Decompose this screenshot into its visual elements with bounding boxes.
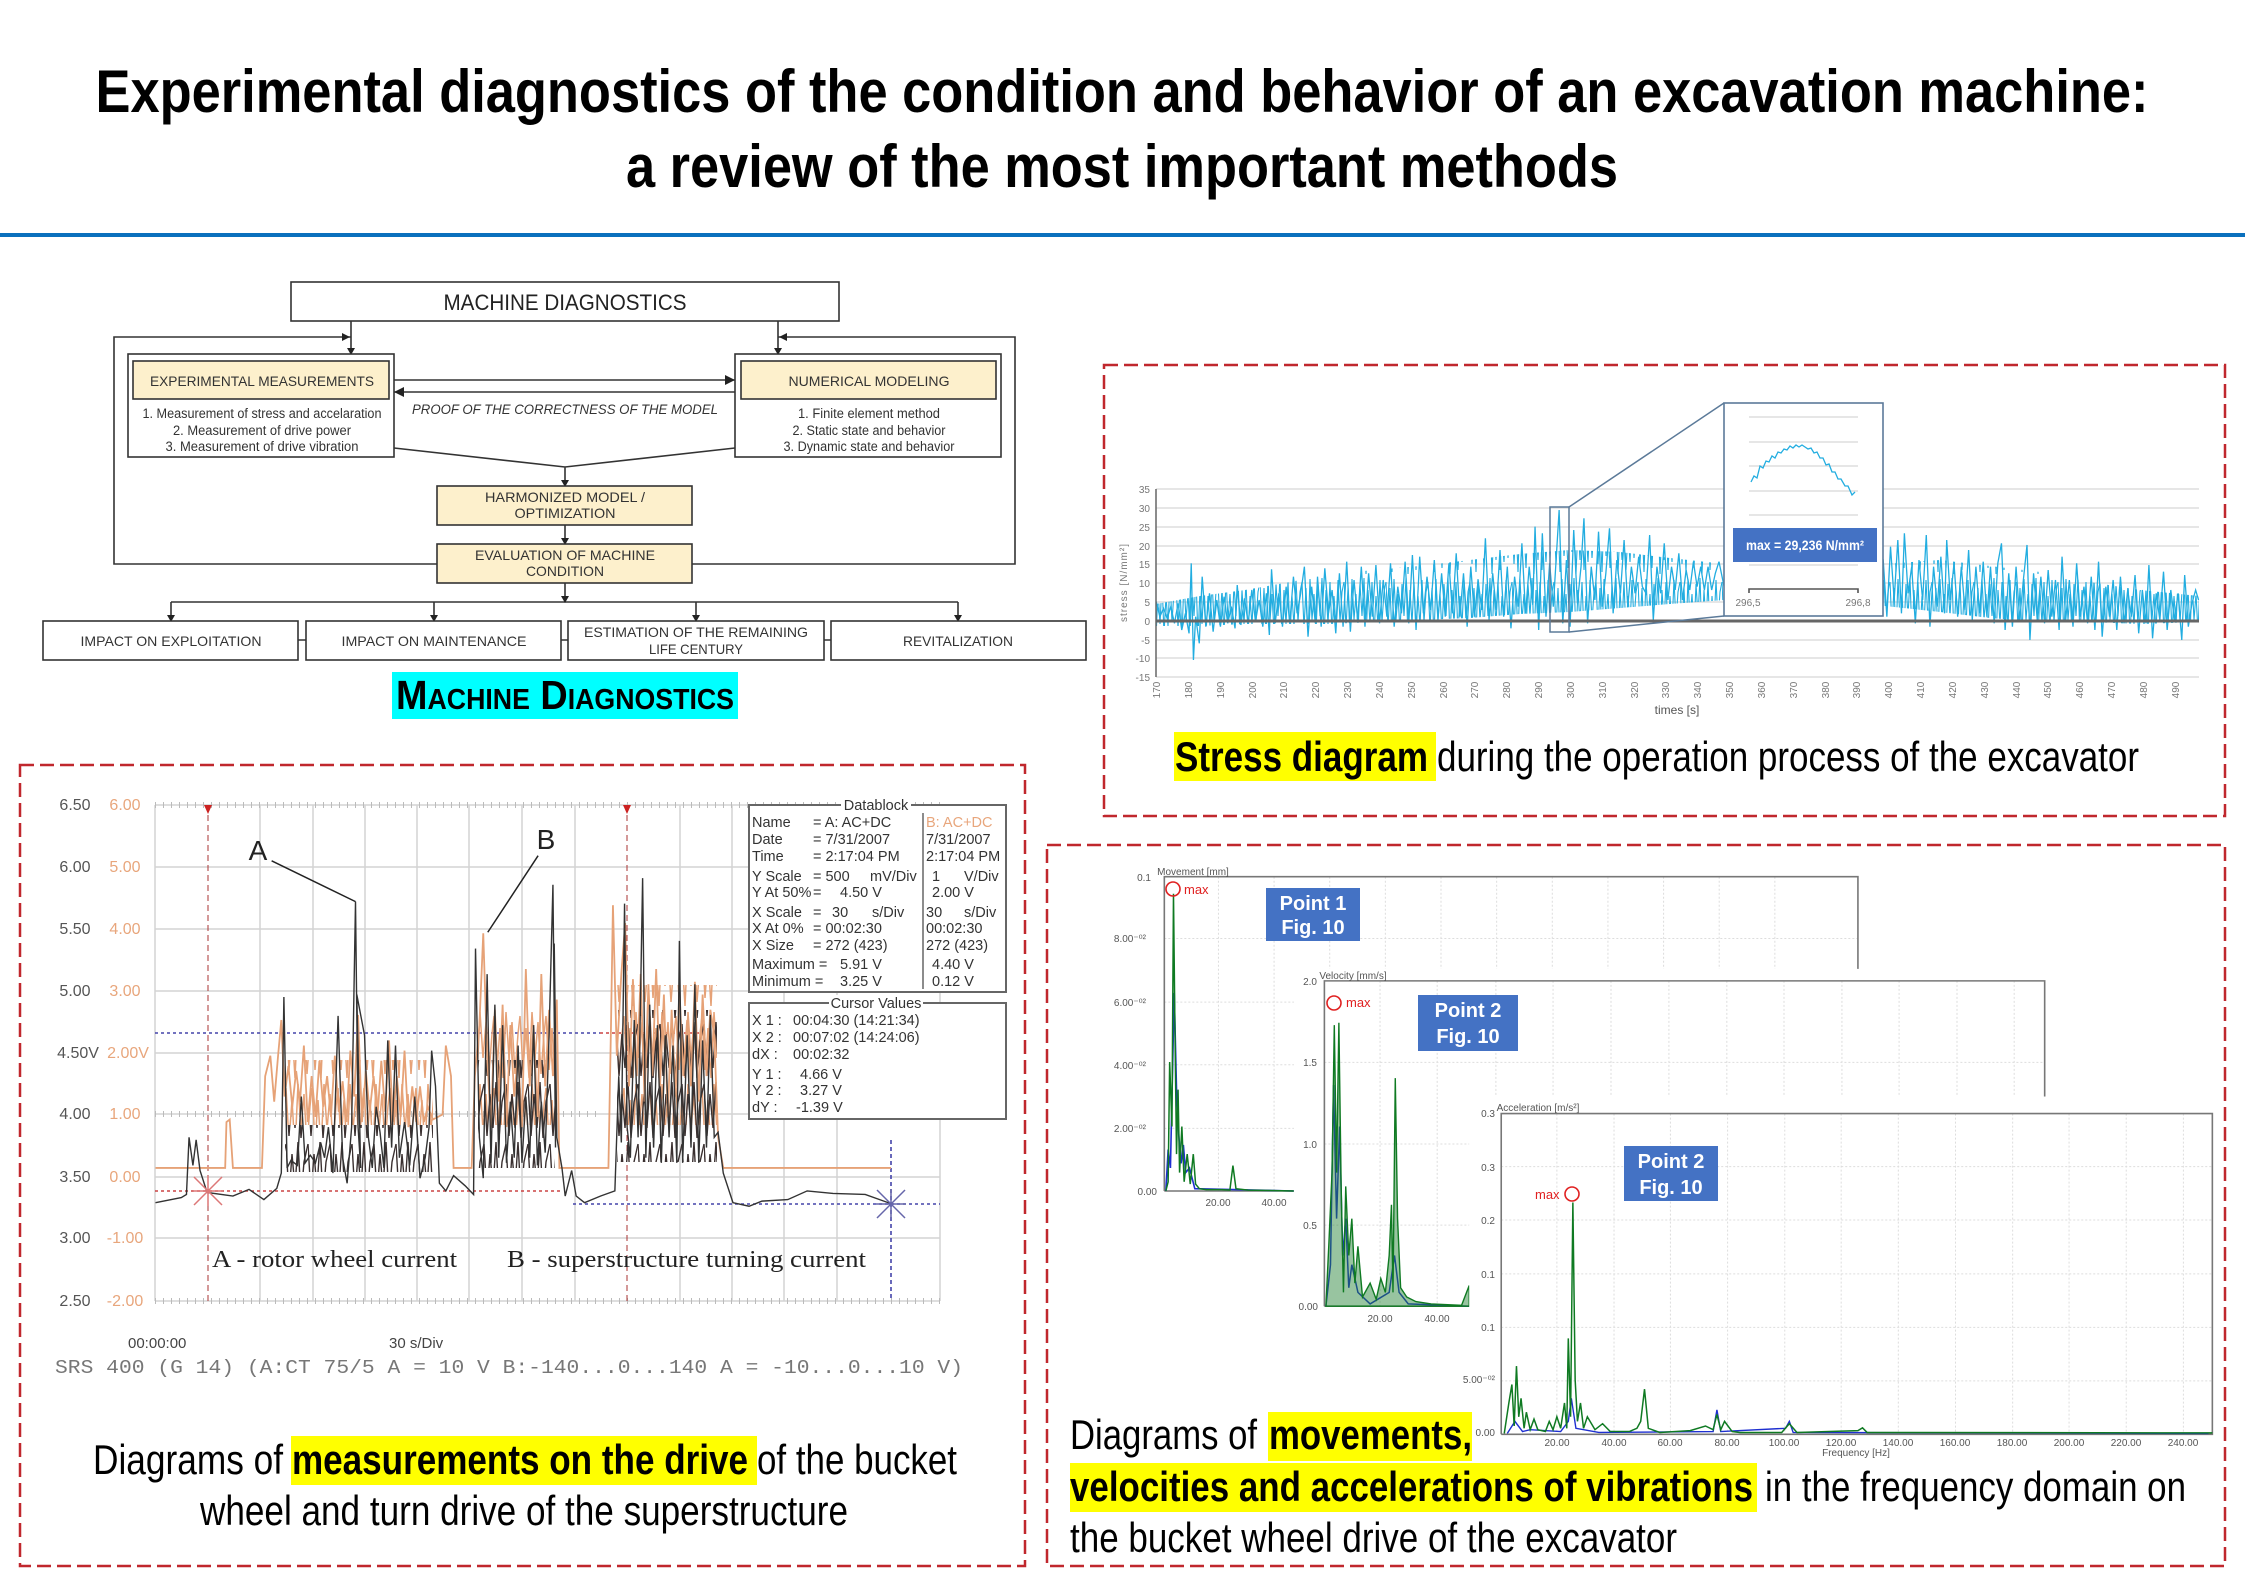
cursor values: dY : xyxy=(752,1100,778,1116)
box: evaluation of machine condition: CONDITION xyxy=(526,563,604,579)
chart: velocity spectrum: 2.0 xyxy=(1303,977,1317,988)
x axis labels: 270 xyxy=(1470,681,1481,698)
x axis labels: 230 xyxy=(1343,681,1354,698)
cursor values: dX : xyxy=(752,1047,778,1063)
chart: acceleration spectrum xyxy=(1463,1097,2220,1459)
cursor values: 4.66 V xyxy=(800,1067,842,1083)
chart: velocity spectrum: 1.0 xyxy=(1303,1140,1317,1151)
label: point 2 velocity xyxy=(1418,995,1518,1051)
chart: acceleration spectrum: 200.00 xyxy=(2054,1438,2085,1449)
chart: acceleration spectrum: 0.00 xyxy=(1476,1428,1495,1439)
time labels: 30 s/Div xyxy=(389,1335,444,1352)
datablock: 2.00 V xyxy=(932,885,974,901)
chart: acceleration spectrum: Frequency [Hz] xyxy=(1822,1448,1890,1459)
right axis labels: 2.00V xyxy=(107,1045,149,1062)
datablock: 4.50 V xyxy=(840,885,882,901)
chart: stress over time xyxy=(1119,485,2199,717)
label: point 2 acceleration: Fig. 10 xyxy=(1639,1177,1703,1199)
label: point 2 velocity: Fig. 10 xyxy=(1436,1026,1500,1048)
box: impact on exploitation xyxy=(43,621,298,660)
caption: vibration spectra xyxy=(1070,1411,2186,1561)
label: point 1 xyxy=(1266,888,1360,941)
chart: velocity spectrum: Velocity [mm/s] xyxy=(1319,971,1387,982)
curve labels: A xyxy=(249,835,268,866)
chart: acceleration spectrum: max xyxy=(1535,1187,1560,1202)
x axis labels: 260 xyxy=(1439,681,1450,698)
label: point 2 velocity: Point 2 xyxy=(1435,1000,1501,1022)
caption: drive measurements: measurements on the drive xyxy=(292,1436,748,1483)
box: experimental measurements: 2. Measurement of drive power xyxy=(173,423,351,438)
x axis labels: 440 xyxy=(2012,681,2023,698)
cursor values: X 2 : xyxy=(752,1030,782,1046)
chart: velocity spectrum xyxy=(1294,969,2048,1333)
cursor values xyxy=(749,995,1006,1119)
box: impact on maintenance xyxy=(306,621,561,660)
caption: vibration spectra: Diagrams of xyxy=(1070,1411,1257,1458)
caption: drive measurements: Diagrams of xyxy=(93,1436,283,1483)
datablock: X Scale xyxy=(752,905,802,921)
datablock: = 500 xyxy=(813,869,850,885)
datablock: 7/31/2007 xyxy=(926,832,991,848)
chart: velocity spectrum: 1.5 xyxy=(1303,1058,1317,1069)
x axis labels: 420 xyxy=(1948,681,1959,698)
datablock: V/Div xyxy=(964,869,999,885)
series A: rotor wheel current xyxy=(155,878,891,1206)
x axis labels: 330 xyxy=(1661,681,1672,698)
cursor values: X 1 : xyxy=(752,1013,782,1029)
x axis labels: 180 xyxy=(1184,681,1195,698)
left axis labels: 4.00 xyxy=(59,1106,91,1123)
chart: oscilloscope current traces: B xyxy=(537,824,555,855)
left axis labels: 5.00 xyxy=(59,983,91,1000)
chart: velocity spectrum: 40.00 xyxy=(1424,1314,1450,1325)
box: impact on maintenance: IMPACT ON MAINTENANCE xyxy=(342,633,526,649)
chart: movement spectrum: 0.00 xyxy=(1138,1187,1157,1198)
box: numerical modeling: NUMERICAL MODELING xyxy=(788,373,950,389)
box: estimation of remaining life xyxy=(568,621,824,660)
x axis labels: 370 xyxy=(1789,681,1800,698)
box: experimental measurements: EXPERIMENTAL MEASUREMENTS xyxy=(150,373,374,389)
datablock: Date xyxy=(752,832,783,848)
chart: movement spectrum: 0.1 xyxy=(1137,873,1151,884)
chart: movement spectrum: 40.00 xyxy=(1261,1198,1287,1209)
cursor values: Y 1 : xyxy=(752,1067,782,1083)
chart: acceleration spectrum: 0.1 xyxy=(1481,1270,1495,1281)
left axis labels: 6.00 xyxy=(59,859,91,876)
y axis labels: 30 xyxy=(1139,504,1150,515)
right axis labels: 4.00 xyxy=(109,921,141,938)
x axis labels: 450 xyxy=(2043,681,2054,698)
datablock: X At 0% xyxy=(752,921,804,937)
left axis labels: 4.50V xyxy=(57,1045,99,1062)
x axis labels: 310 xyxy=(1598,681,1609,698)
x axis labels: 240 xyxy=(1375,681,1386,698)
caption: stress diagram: Stress diagram xyxy=(1175,733,1428,780)
right axis labels: 5.00 xyxy=(109,859,141,876)
caption: drive measurements xyxy=(93,1436,957,1534)
cursor values: 3.27 V xyxy=(800,1083,842,1099)
x axis labels: 320 xyxy=(1630,681,1641,698)
datablock: Y At 50% xyxy=(752,885,811,901)
x axis labels: 300 xyxy=(1566,681,1577,698)
chart: acceleration spectrum: 160.00 xyxy=(1940,1438,1971,1449)
max value label xyxy=(1733,528,1877,562)
datablock: B: AC+DC xyxy=(926,815,992,831)
datablock: X Size xyxy=(752,938,794,954)
x axis labels: 360 xyxy=(1757,681,1768,698)
box: evaluation of machine condition: EVALUATION OF MACHINE xyxy=(475,547,655,563)
x axis labels: 460 xyxy=(2075,681,2086,698)
instrument line: SRS 400 (G 14) (A:CT 75/5 A = 10 V B:-140...0...140 A = -10...0...10 V) xyxy=(55,1357,963,1379)
time labels xyxy=(128,1335,444,1352)
y axis labels: 25 xyxy=(1139,523,1150,534)
chart: acceleration spectrum: 0.3 xyxy=(1481,1163,1495,1174)
x axis labels: 490 xyxy=(2171,681,2182,698)
datablock: = 2:17:04 PM xyxy=(813,849,900,865)
caption: drive measurements: wheel and turn drive of the superstructure xyxy=(199,1487,848,1534)
chart: movement spectrum: 6.00⁻⁰² xyxy=(1114,998,1147,1009)
chart: acceleration spectrum: 180.00 xyxy=(1997,1438,2028,1449)
datablock: = xyxy=(813,885,821,901)
cursor values: Y 2 : xyxy=(752,1083,782,1099)
box: machine diagnostics: MACHINE DIAGNOSTICS xyxy=(444,290,686,315)
label: point 1: Point 1 xyxy=(1280,893,1346,915)
x axis labels: 340 xyxy=(1693,681,1704,698)
label: point 2 acceleration xyxy=(1624,1146,1718,1201)
chart: acceleration spectrum: 40.00 xyxy=(1601,1438,1627,1449)
chart: acceleration spectrum: 220.00 xyxy=(2111,1438,2142,1449)
right axis labels: -1.00 xyxy=(107,1230,143,1247)
right axis labels: 1.00 xyxy=(109,1106,141,1123)
x axis labels: 250 xyxy=(1407,681,1418,698)
datablock: 1 xyxy=(932,869,940,885)
box: numerical modeling xyxy=(735,354,1001,457)
datablock: Y Scale xyxy=(752,869,802,885)
right axis labels: 3.00 xyxy=(109,983,141,1000)
datablock: Datablock xyxy=(844,798,909,814)
title xyxy=(96,58,2148,200)
x axis labels: 210 xyxy=(1279,681,1290,698)
x axis labels: 190 xyxy=(1216,681,1227,698)
panel: drive measurements xyxy=(20,765,1025,1566)
zoom inset xyxy=(1550,403,1883,632)
box: harmonized model: HARMONIZED MODEL / xyxy=(485,489,645,505)
box: estimation of remaining life: LIFE CENTURY xyxy=(649,641,744,657)
chart: acceleration spectrum: 0.2 xyxy=(1481,1216,1495,1227)
legend: current names xyxy=(212,1247,866,1273)
x axis title: times [s] xyxy=(1655,703,1699,717)
box: evaluation of machine condition xyxy=(437,544,692,583)
datablock: mV/Div xyxy=(870,869,917,885)
y axis title: stress [N/mm²] xyxy=(1119,543,1130,622)
caption: stress diagram xyxy=(1174,732,2139,781)
chart: velocity spectrum: max xyxy=(1346,995,1371,1010)
datablock: 0.12 V xyxy=(932,974,974,990)
datablock: = xyxy=(813,905,821,921)
chart: acceleration spectrum: 20.00 xyxy=(1544,1438,1570,1449)
datablock: Name xyxy=(752,815,791,831)
x axis labels: 400 xyxy=(1884,681,1895,698)
zoom inset: 296,5 xyxy=(1735,598,1761,609)
box: harmonized model xyxy=(437,486,692,525)
x axis labels: 390 xyxy=(1852,681,1863,698)
chart: movement spectrum: Movement [mm] xyxy=(1157,867,1229,878)
datablock: 272 (423) xyxy=(926,938,988,954)
datablock: 00:02:30 xyxy=(926,921,982,937)
chart: movement spectrum: max xyxy=(1184,882,1209,897)
right axis labels xyxy=(107,797,149,1310)
label: point 1: Fig. 10 xyxy=(1281,917,1345,939)
chart: velocity spectrum: 0.5 xyxy=(1303,1221,1317,1232)
left axis labels: 2.50 xyxy=(59,1293,91,1310)
time labels: 00:00:00 xyxy=(128,1335,186,1352)
left axis labels xyxy=(57,797,99,1310)
cursor values: 00:04:30 (14:21:34) xyxy=(793,1013,920,1029)
box: revitalization xyxy=(831,621,1086,660)
chart: movement spectrum: 8.00⁻⁰² xyxy=(1114,934,1147,945)
datablock: = A: AC+DC xyxy=(813,815,891,831)
datablock: 30 xyxy=(832,905,848,921)
datablock: s/Div xyxy=(964,905,997,921)
x axis labels: 290 xyxy=(1534,681,1545,698)
y axis labels: 5 xyxy=(1144,598,1150,609)
box: experimental measurements: 3. Measurement of drive vibration xyxy=(166,439,358,454)
y axis labels: 0 xyxy=(1144,617,1150,628)
chart: acceleration spectrum: 60.00 xyxy=(1657,1438,1683,1449)
datablock: s/Div xyxy=(872,905,905,921)
box: harmonized model: OPTIMIZATION xyxy=(514,505,616,521)
box: estimation of remaining life: ESTIMATION OF THE REMAINING xyxy=(584,624,808,640)
right axis labels: 0.00 xyxy=(109,1169,141,1186)
panel: vibration spectra xyxy=(1047,845,2225,1566)
x axis labels: 220 xyxy=(1311,681,1322,698)
chart: velocity spectrum: 0.00 xyxy=(1299,1302,1318,1313)
chart: movement spectrum xyxy=(1114,867,1858,1209)
datablock: 3.25 V xyxy=(840,974,882,990)
left axis labels: 5.50 xyxy=(59,921,91,938)
chart: acceleration spectrum: Acceleration [m/s²] xyxy=(1497,1103,1580,1114)
chart: acceleration spectrum: 80.00 xyxy=(1714,1438,1740,1449)
datablock: Time xyxy=(752,849,784,865)
caption: vibration spectra: the bucket wheel drive of the excavator xyxy=(1070,1514,1677,1561)
datablock: 4.40 V xyxy=(932,957,974,973)
chart: movement spectrum: 20.00 xyxy=(1205,1198,1231,1209)
y axis labels: 15 xyxy=(1139,560,1150,571)
y axis labels: -5 xyxy=(1141,636,1150,647)
chart: movement spectrum: 2.00⁻⁰² xyxy=(1114,1124,1147,1135)
datablock: Maximum = xyxy=(752,957,827,973)
datablock: Minimum = xyxy=(752,974,823,990)
datablock: = 272 (423) xyxy=(813,938,888,954)
chart: acceleration spectrum: 240.00 xyxy=(2168,1438,2199,1449)
chart: acceleration spectrum: 0.3 xyxy=(1481,1109,1495,1120)
x axis labels: 480 xyxy=(2139,681,2150,698)
label: point 2 acceleration: Point 2 xyxy=(1638,1151,1704,1173)
left axis labels: 6.50 xyxy=(59,797,91,814)
box: numerical modeling: 3. Dynamic state and behavior xyxy=(784,439,955,454)
cursor values: 00:02:32 xyxy=(793,1047,849,1063)
datablock: = 7/31/2007 xyxy=(813,832,890,848)
x axis labels: 170 xyxy=(1152,681,1163,698)
datablock: 30 xyxy=(926,905,942,921)
y axis labels: -10 xyxy=(1136,654,1150,665)
y axis labels: -15 xyxy=(1136,673,1150,684)
chart: oscilloscope current traces xyxy=(55,797,963,1379)
box: experimental measurements xyxy=(128,354,394,457)
y axis labels xyxy=(1136,485,1150,684)
panel: machine diagnostics flowchart xyxy=(43,282,1086,660)
datablock: 5.91 V xyxy=(840,957,882,973)
x axis labels: 430 xyxy=(1980,681,1991,698)
box: numerical modeling: 1. Finite element method xyxy=(798,406,940,421)
x axis labels: 410 xyxy=(1916,681,1927,698)
caption: vibration spectra: movements, xyxy=(1269,1411,1472,1458)
cursor values: -1.39 V xyxy=(796,1100,843,1116)
series B: superstructure turning current xyxy=(155,905,891,1168)
y axis labels: 35 xyxy=(1139,485,1150,496)
x axis labels: 470 xyxy=(2107,681,2118,698)
x axis labels: 350 xyxy=(1725,681,1736,698)
box: revitalization: REVITALIZATION xyxy=(903,633,1013,649)
caption: vibration spectra: velocities and accelerations of vibrations xyxy=(1070,1463,1753,1510)
datablock xyxy=(749,797,1006,992)
chart: velocity spectrum: 20.00 xyxy=(1367,1314,1393,1325)
x axis labels: 380 xyxy=(1821,681,1832,698)
y axis labels: 20 xyxy=(1139,542,1150,553)
datablock: = 00:02:30 xyxy=(813,921,882,937)
heading: machine diagnostics: Machine Diagnostics xyxy=(396,672,734,718)
box: experimental measurements: 1. Measurement of stress and accelaration xyxy=(142,406,382,421)
label: proof of the correctness: PROOF OF THE CORRECTNESS OF THE MODEL xyxy=(412,401,718,417)
left axis labels: 3.00 xyxy=(59,1230,91,1247)
caption: drive measurements: of the bucket xyxy=(757,1436,957,1483)
panel: stress diagram xyxy=(1104,365,2225,816)
right axis labels: -2.00 xyxy=(107,1293,143,1310)
legend: current names: B - superstructure turning current xyxy=(507,1247,866,1273)
box: machine diagnostics xyxy=(291,282,839,321)
x axis labels: 280 xyxy=(1502,681,1513,698)
chart: movement spectrum: 4.00⁻⁰² xyxy=(1114,1061,1147,1072)
chart: acceleration spectrum: 120.00 xyxy=(1826,1438,1857,1449)
max value label: max = 29,236 N/mm² xyxy=(1746,537,1864,553)
chart: acceleration spectrum: 5.00⁻⁰² xyxy=(1463,1375,1496,1386)
title: a review of the most important methods xyxy=(626,133,1618,200)
y axis labels: 10 xyxy=(1139,579,1150,590)
cursor values: 00:07:02 (14:24:06) xyxy=(793,1030,920,1046)
legend: current names: A - rotor wheel current xyxy=(212,1247,457,1273)
chart: acceleration spectrum: 100.00 xyxy=(1769,1438,1800,1449)
left axis labels: 3.50 xyxy=(59,1169,91,1186)
x axis labels xyxy=(1152,681,2182,698)
right axis labels: 6.00 xyxy=(109,797,141,814)
box: numerical modeling: 2. Static state and behavior xyxy=(792,423,946,438)
box: impact on exploitation: IMPACT ON EXPLOITATION xyxy=(80,633,262,649)
chart: acceleration spectrum: 0.1 xyxy=(1481,1323,1495,1334)
x axis labels: 200 xyxy=(1248,681,1259,698)
zoom inset: 296,8 xyxy=(1845,598,1871,609)
chart: acceleration spectrum: 140.00 xyxy=(1883,1438,1914,1449)
cursor values: Cursor Values xyxy=(831,996,921,1012)
datablock: 2:17:04 PM xyxy=(926,849,1000,865)
